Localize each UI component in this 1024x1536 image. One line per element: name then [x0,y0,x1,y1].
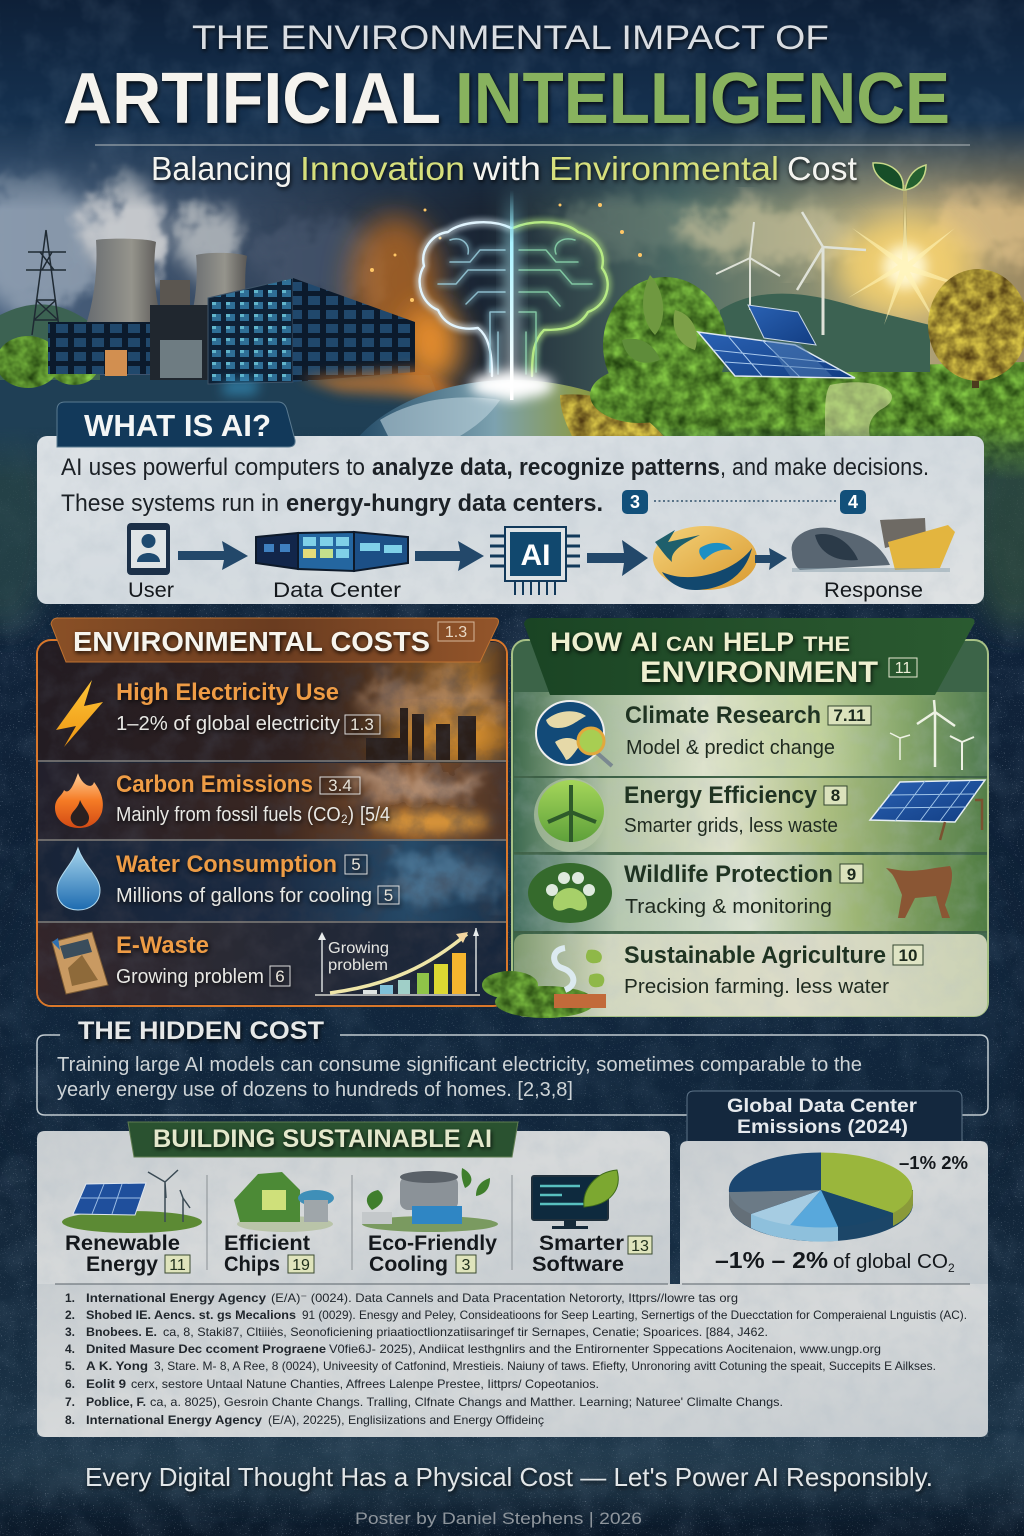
row: climate research [514,692,987,776]
icon: flame [55,773,103,828]
text: high electricity use: High Electricity Use [116,679,339,706]
subtitle: Balancing [151,150,292,187]
heading banner: 11 [895,660,911,677]
heading: THE HIDDEN COST [78,1017,324,1045]
reference 6: 6. [65,1377,75,1391]
reference 8: (E/A), 20225), Englisiizations and Energy Offideinç [268,1413,544,1427]
chart: growing problem bars [315,928,480,995]
heading banner [128,1122,518,1157]
chart: growing problem bars: Growing [328,940,389,957]
heading banner: ENVIRONMENTAL COSTS [73,626,430,657]
subtitle: Environmental [549,150,779,187]
label: eco-friendly cooling: 3 [462,1257,471,1274]
text: water consumption: 5 [351,855,361,874]
title: artificial: ARTIFICIAL [63,59,441,139]
label: renewable energy [65,1232,190,1276]
text: e-waste: 6 [275,967,285,986]
heading banner: HOW [550,627,623,657]
arrow [587,540,648,576]
flow labels: Data Center [273,579,401,602]
sky, clouds and ground [0,120,1024,480]
label: efficient chips: Chips [224,1253,280,1276]
text: climate research: Model & predict change [626,737,835,759]
reference 3: Bnobees. E. [86,1325,157,1339]
reference 8 [65,1413,544,1427]
reference 1: 1. [65,1291,75,1305]
citation badges: 4 [848,492,858,512]
label: efficient chips [224,1232,314,1276]
description text: AI uses powerful computers to [61,454,365,481]
data center building [48,278,470,400]
icon: agriculture sprout and tractor [482,948,606,1018]
text: carbon emissions: 3.4 [328,776,352,795]
icon: swirl processing [653,526,757,590]
flow labels: User [128,579,174,602]
heading banner: CAN [666,633,714,656]
text: sustainable agriculture [624,942,923,998]
reference 1: International Energy Agency [86,1291,266,1305]
text: e-waste [116,932,290,988]
stat caption: of global CO [833,1251,948,1273]
footer tagline: Every Digital Thought Has a Physical Cost — Let's Power AI Responsibly. [85,1462,933,1492]
text: sustainable agriculture: Sustainable Agriculture [624,942,886,969]
row: water [86,841,506,921]
label: efficient chips: Efficient [224,1232,310,1255]
title: eyebrow: THE ENVIRONMENTAL IMPACT OF [192,19,829,57]
arrow [755,548,787,570]
reference 7: Poblice, F. [86,1395,146,1409]
text: water consumption: 5 [384,886,393,905]
body text: yearly energy use of dozens to hundreds of homes. [2,3,8] [57,1079,573,1101]
label: renewable energy: 11 [169,1257,186,1274]
text: energy efficiency: Energy Efficiency [624,782,818,809]
sun [848,205,975,330]
text: water consumption: Water Consumption [116,851,337,878]
reference 4: 4. [65,1342,75,1356]
label: eco-friendly cooling [368,1232,497,1276]
reference 4: Dnited Masure Dec ccoment Prograene [86,1342,326,1356]
earth globe [360,380,664,436]
power pylon [26,230,66,335]
chart: 3D pie [729,1152,913,1242]
text: e-waste: Growing problem [116,966,264,988]
foliage [590,275,727,423]
arrow [415,541,484,571]
text: wildlife protection: 9 [847,865,856,884]
text: climate research: 7.11 [833,706,866,725]
icon: water drop [57,848,100,910]
label: efficient chips: 19 [292,1257,310,1274]
icon: globe with magnifier [536,701,612,766]
body text: Training large AI models can consume significant electricity, sometimes comparable to the [57,1054,862,1076]
reference 5: 5. [65,1359,75,1373]
icon: solar and wind [62,1170,202,1233]
subtitle: Innovation [300,150,465,187]
label: smarter software: Smarter [539,1232,624,1255]
reference 7: 7. [65,1395,75,1409]
text: e-waste: E-Waste [116,932,209,959]
flow labels [128,579,923,602]
icon: smarter software [532,1170,618,1229]
text: high electricity use: 1.3 [350,715,374,734]
icon: efficient chips [234,1172,334,1232]
heading banner: AI [630,627,658,657]
flow labels: Response [824,579,923,602]
footer credit: Poster by Daniel Stephens | 2026 [355,1509,642,1528]
distant hills [0,294,930,380]
text: water consumption: Millions of gallons for cooling [116,885,372,907]
reference 2: Shobed IE. Aencs. st. gs Mecalions [86,1308,296,1322]
reference 8: International Energy Agency [86,1413,262,1427]
reference 4 [65,1342,881,1356]
citation badges [622,490,866,514]
text: energy efficiency [624,782,847,837]
label: smarter software [532,1232,652,1276]
reference 2: 2. [65,1308,75,1322]
hero illustration: energy versus nature landscape [0,126,1024,476]
panel: how AI can help [482,618,988,1018]
reference 8: 8. [65,1413,75,1427]
citation badges: 3 [630,492,640,512]
reference 5: A K. Yong [86,1359,148,1373]
text: energy efficiency: 8 [831,786,840,805]
row: sustainable agriculture [514,934,987,1016]
heading tab [57,402,295,447]
stat caption: –1% – 2% [715,1247,828,1273]
reference 2: 91 (0029). Enesgy and Peley, Consideatioons for Seep Learting, Sernertigs of the Duecctation for Comperaienal Lnguistis (AC). [302,1308,967,1322]
panel: what is AI [37,402,984,604]
solar panels [698,305,855,378]
panel: global data center emissions [680,1091,988,1286]
heading banner [524,618,974,695]
icon: sprout [873,163,926,260]
description text: , and make decisions. [720,454,929,481]
heading banner: 1.3 [445,624,467,641]
icon: paw print [528,863,612,923]
light beam [470,190,554,400]
panel: building sustainable AI [37,1122,670,1286]
text: energy efficiency: Smarter grids, less waste [624,815,838,837]
stat caption: 2 [948,1261,955,1275]
icon: data center [256,532,408,571]
row: wildlife protection [514,855,987,931]
label: eco-friendly cooling: Eco-Friendly [368,1232,497,1255]
text: climate research [625,702,871,759]
text: wildlife protection [624,861,863,918]
trees left [0,336,98,388]
label: renewable energy: Energy [86,1253,158,1276]
text: sustainable agriculture: 10 [899,946,917,965]
stat caption [715,1247,955,1275]
icon: AI chip: AI [520,539,550,572]
wind turbines [716,212,866,335]
tree right [928,269,1024,388]
text: sustainable agriculture: Precision farming. less water [624,976,889,998]
chart label: –1% 2% [899,1153,968,1173]
body text [57,1054,862,1101]
heading banner: HELP [723,627,794,657]
heading banner: BUILDING SUSTAINABLE AI [153,1125,492,1153]
reference 1 [65,1291,738,1305]
icon: lightning bolt [56,680,103,747]
text: carbon emissions [116,771,390,826]
reference 6: cerx, sestore Untaal Natune Chanties, Affrees Lalenpe Prestee, Iittprs/ Copeotanios. [131,1377,599,1391]
subtitle [151,150,857,187]
label: smarter software: 13 [631,1238,649,1255]
heading tab: Emissions (2024) [737,1117,908,1138]
text: wildlife protection: Tracking & monitoring [625,896,832,918]
description text [61,454,929,517]
text: wildlife protection: Wildlife Protection [624,861,833,888]
title [63,19,970,187]
heading tab [687,1091,962,1145]
heading banner: THE [803,633,850,656]
subtitle: with [472,150,541,187]
icon: AI chip [490,527,580,595]
title: intelligence: INTELLIGENCE [455,59,950,139]
reference 3: 3. [65,1325,75,1339]
reference 6: Eolit 9 [86,1377,126,1391]
text: carbon emissions: Carbon Emissions [116,771,313,798]
label: renewable energy: Renewable [65,1232,180,1255]
subtitle: Cost [787,150,857,187]
heading tab: WHAT IS AI? [84,408,271,443]
description text: These systems run in [61,490,279,517]
text: high electricity use [116,679,380,735]
reference 7: ca, a. 8025), Gesroin Chante Changs. Tralling, Clfnate Changs and Matther. Learning; Naturee' Climalte Changs. [150,1395,783,1409]
text: carbon emissions: [5/4 [360,804,390,826]
illustration: wind turbines [890,700,974,770]
sparks [370,203,642,322]
chart: growing problem bars: problem [328,957,388,974]
icon: e-waste device [52,932,108,994]
panel: environmental costs [37,618,520,1006]
reference 5: 3, Stare. M- 8, A Ree, 8 (0024), Univeesity of Catfonind, Mrestieis. Naiuny of taws. Efiefty, Unronoring avitt Cotuning the speait, Succepits E Ailkses. [154,1359,936,1373]
description text: analyze data, recognize patterns [372,454,720,481]
row: e-waste [38,923,506,1006]
panel: the hidden cost [37,1017,988,1115]
arrow [178,541,248,570]
illustration: solar panel [870,780,985,840]
text: carbon emissions: Mainly from fossil fuels (CO₂) [116,804,354,826]
row: carbon [38,763,506,839]
icon: turbine orb [534,778,606,852]
heading tab: Global Data Center [727,1096,918,1117]
panel: references [37,1284,988,1437]
cooling towers [86,239,248,325]
heading banner: ENVIRONMENT [640,656,878,689]
glowing brain with circuit lines [420,222,608,376]
icon: user device [127,523,170,575]
text: water consumption [116,851,399,907]
icon: stones and folder response [792,518,955,572]
illustration: animal [886,866,952,918]
label: smarter software: Software [532,1253,624,1276]
reference 1: (E/A)⁻ (0024). Data Cannels and Data Pracentation Netororty, Ittprs//lowre tas org [271,1291,738,1305]
description text: energy-hungry data centers. [286,490,603,517]
reference 3: ca, 8, Staki87, Cltiiiės, Seonoficiening priaatioctlionzatiisaringef tir Sernapes, Cenatie; Spoarices. [884, J462. [163,1325,768,1339]
text: climate research: Climate Research [625,702,821,729]
heading banner [51,618,498,662]
row: high electricity [38,642,520,760]
label: eco-friendly cooling: Cooling [369,1253,448,1276]
reference 4: V0fie6J- 2025), Andiicat lesthgnlirs and the Entirornenter Sppecations Aocitenaion, www.ungp.org [329,1342,881,1356]
row: energy efficiency [514,778,987,852]
icon: eco-friendly cooling [362,1168,498,1232]
text: high electricity use: 1–2% of global electricity [116,713,340,735]
